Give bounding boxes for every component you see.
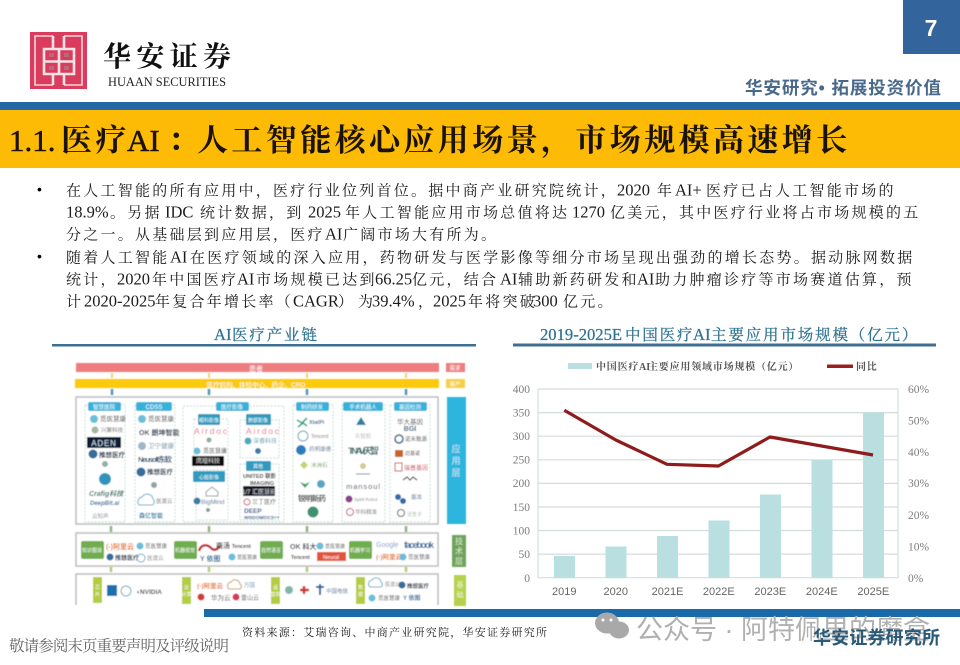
foundation layer: 营商 — [270, 591, 281, 598]
column: health management: 觅医慧康 — [100, 414, 126, 423]
chart legend: 同比 — [856, 360, 878, 373]
technology layer: 医渡云 — [147, 554, 164, 562]
left axis labels: 200 — [513, 478, 530, 490]
left axis labels: 150 — [513, 502, 530, 514]
column: medical devices: 迈基诺 — [405, 450, 420, 457]
column: medical imaging: 眼科影像 — [199, 417, 219, 424]
right panel heading — [513, 325, 936, 346]
chart legend: 中国医疗 — [596, 360, 639, 373]
column: medical devices: 瑞普基因 — [404, 464, 428, 472]
column: CDSS: 觅医慧康 — [148, 414, 174, 423]
body text: second bullet: AI — [500, 270, 517, 288]
body text: second bullet: 统计， — [66, 272, 118, 288]
source note: 资料来源：艾瑞咨询、中商产业研究院，华安证券研究所 — [242, 625, 547, 639]
column: medical imaging: 1/7 汇医慧影 — [242, 488, 276, 496]
body text: second bullet: 2020-2025 — [84, 292, 156, 310]
foundation layer: 中国电信 — [326, 587, 349, 595]
technology layer: Google — [376, 542, 399, 549]
watermark icon: WeChat — [595, 612, 629, 638]
column: drug discovery: XtalPi — [309, 420, 325, 426]
application layer side label: 用 — [451, 456, 461, 466]
body text: second bullet — [37, 248, 915, 310]
body text: second bullet: 在医疗领域的深入应用，药物研发与医学影像等细分市场呈现出强劲的增长态势。据动脉网数据 — [190, 248, 915, 266]
right panel heading: AI — [693, 325, 711, 344]
column: surgical robots: 手术机器人 — [349, 403, 377, 411]
foundation layer: (-)阿里云 — [197, 582, 223, 590]
column: CDSS: CDSS — [146, 405, 162, 411]
body text: second bullet: 66.25 — [375, 270, 412, 288]
technology layer: 商汤 — [216, 541, 230, 550]
header blue rule — [0, 102, 960, 110]
technology layer: Tencent — [291, 555, 310, 561]
body text: first bullet: 18.9% — [66, 202, 109, 222]
body text: first bullet: 。另据 — [110, 204, 162, 222]
foundation layer: 片 — [95, 591, 100, 598]
column: medical imaging: DEEP — [244, 508, 262, 515]
column: CDSS: 森亿智能 — [139, 512, 163, 520]
logo wordmark: 华安证券 — [103, 41, 231, 73]
body text: second bullet: AI — [637, 270, 654, 288]
chart legend — [568, 360, 878, 373]
title banner: 医疗 — [61, 123, 130, 158]
technology layer — [76, 533, 438, 566]
technology layer: Tencent — [232, 544, 251, 550]
technology layer: facebook — [404, 540, 435, 550]
left axis labels: 300 — [513, 431, 530, 443]
right axis labels: 20% — [908, 510, 930, 522]
x axis labels: 2020 — [604, 586, 628, 598]
right axis labels: 60% — [908, 384, 930, 396]
x axis labels: 2019 — [552, 586, 577, 598]
body text: second bullet: 亿元，结合 — [412, 272, 498, 288]
title banner: ： — [168, 123, 202, 158]
technology layer: OK 科大 — [290, 542, 316, 551]
column: surgical robots: mansoul — [346, 482, 380, 491]
column: drug discovery — [296, 402, 332, 518]
body text: first bullet: 2020 — [617, 180, 650, 200]
foundation layer: 据 — [358, 591, 363, 598]
column: CDSS: 推想医疗 — [147, 467, 174, 476]
technology layer side label: 技 — [455, 536, 463, 546]
demand tier bar — [76, 363, 465, 373]
body text: second bullet: 亿元。 — [563, 294, 615, 310]
application layer side label: 层 — [451, 468, 461, 478]
column: health management: 云知声 — [92, 512, 109, 520]
column: health management: 推想医疗 — [99, 450, 126, 459]
x axis labels: 2025E — [857, 586, 889, 598]
column: medical devices: 泛生子 — [407, 511, 422, 518]
body text: first bullet — [37, 180, 921, 244]
foundation layer: 华为云 — [211, 593, 231, 602]
disclaimer: 敬请参阅末页重要声明及评级说明 — [9, 636, 229, 655]
right axis labels: 10% — [908, 542, 930, 554]
left axis labels: 50 — [518, 549, 530, 561]
right axis labels: 50% — [908, 416, 930, 428]
body text: second bullet: 市场规模已达到 — [256, 270, 377, 288]
body text: second bullet: AI — [237, 270, 254, 288]
chart legend: AI — [639, 362, 650, 373]
body text: second bullet: 2020 — [117, 270, 150, 288]
right axis labels: 40% — [908, 447, 930, 459]
technology layer: 知识图谱 — [82, 547, 102, 554]
column: surgical robots: 天智航 — [355, 432, 372, 440]
right panel heading: 2019-2025E — [540, 325, 622, 344]
column: CDSS: OK 朗坤智能 — [139, 428, 179, 437]
column: medical imaging: UNITED 联影 — [243, 472, 277, 480]
chart legend: 主要应用领域市场规模（亿元） — [648, 360, 799, 373]
growth line — [564, 410, 873, 466]
technology layer: Y 依图 — [200, 554, 220, 563]
foundation layer: 觅医慧康 — [378, 594, 401, 602]
foundation layer: Y 依图 — [403, 594, 421, 602]
column: medical imaging: 心脏影像 — [199, 474, 219, 481]
column: surgical robots: TINAVI 天智 — [348, 445, 379, 456]
technology layer side label: 层 — [455, 557, 463, 566]
x axis labels: 2023E — [754, 586, 786, 598]
body text: first bullet: 医疗已占人工智能市场的 — [706, 182, 896, 200]
application layer side label: 应 — [451, 443, 461, 454]
technology layer: Neural — [323, 555, 339, 561]
logo English name: HUAAN SECURITIES — [108, 74, 226, 89]
technology layer: 机器学习 — [350, 547, 370, 554]
body text: first bullet: 1270 — [572, 202, 605, 222]
chart gridlines and axes — [538, 389, 898, 578]
column: medical imaging: 肺部影像 — [248, 417, 268, 424]
foundation layer side label — [454, 575, 466, 606]
column: medical devices: 基准 — [411, 493, 423, 501]
customer tier bar — [75, 379, 465, 389]
technology layer: 推想医疗 — [115, 554, 139, 562]
body text: second bullet: 计 — [66, 294, 83, 310]
column: medical imaging: Airdoc — [246, 426, 280, 436]
technology layer side label: 术 — [455, 546, 463, 556]
left axis labels: 100 — [513, 526, 530, 538]
body text: second bullet: 随着人工智能 — [66, 250, 170, 266]
application layer frame — [76, 397, 438, 524]
body text: first bullet: 广阔市场大有所为。 — [343, 226, 498, 244]
body text: second bullet: AI — [170, 248, 187, 266]
body text: second bullet: 年将突破 — [468, 292, 537, 310]
right panel heading: 主要应用市场规模（亿元） — [711, 325, 919, 344]
column: medical imaging: 兰丁医疗 — [252, 498, 276, 506]
body text: second bullet: 年复合年增长率（ — [155, 292, 293, 310]
body text: second bullet: 为 — [358, 294, 375, 310]
application layer side label — [447, 397, 466, 524]
foundation layer: 推想医疗 — [407, 582, 430, 590]
body text: first bullet: AI — [325, 224, 342, 244]
column: medical imaging: IMAGING — [250, 481, 274, 487]
left axis labels: 400 — [513, 384, 530, 396]
foundation layer: ◖NVIDIA — [136, 589, 162, 596]
column: CDSS: 医渡云 — [156, 497, 173, 505]
technology layer side label — [452, 535, 466, 567]
column: CDSS: 卫宁健康 — [148, 441, 174, 450]
technology layer: 觅医慧康 — [325, 543, 345, 550]
column: surgical robots: Spirit Robot — [354, 497, 378, 502]
foundation layer: 雷山云 — [241, 594, 259, 602]
left panel heading: 医疗产业链 — [232, 326, 319, 344]
technology layer: 觅医慧康 — [237, 554, 257, 561]
body text: first bullet: 统计数据，到 — [200, 204, 304, 222]
column: medical imaging: Airdoc — [194, 426, 228, 436]
column: medical devices — [394, 402, 428, 518]
body text: second bullet: 2025 — [433, 292, 466, 310]
body text: first bullet: 分之一。从基础层到应用层，医疗 — [66, 226, 325, 244]
right axis labels: 0% — [908, 573, 924, 585]
column: drug discovery: 锐明新药 — [298, 493, 326, 503]
title banner: AI — [127, 123, 160, 158]
x axis labels: 2022E — [703, 586, 735, 598]
technology layer: 觅医慧康 — [408, 553, 431, 561]
column: medical imaging: 觅医慧康 — [203, 447, 227, 455]
left axis labels — [513, 384, 530, 585]
column: drug discovery: 制药研发 — [301, 403, 323, 411]
column: health management: DeepBit.ai — [90, 501, 120, 507]
column: CDSS: Neusoft东软 — [138, 454, 172, 464]
title banner: 1.1. — [9, 123, 56, 158]
body text: second bullet: 39.4% — [372, 292, 415, 310]
body text: second bullet: 助力肿瘤诊疗等市场赛道估算，预 — [655, 270, 914, 288]
page number box: 7 — [925, 15, 937, 41]
right panel heading: 中国医疗 — [625, 326, 694, 344]
column: medical imaging — [192, 402, 280, 520]
body text: first bullet: 在人工智能的所有应用中，医疗行业位列首位。据中商产业研究院统计， — [66, 182, 618, 200]
column: medical imaging: WISDOM/OCS++ — [244, 515, 280, 520]
technology layer: (-)阿里云 — [376, 553, 402, 561]
column: medical imaging: 鹰瞳科技 — [196, 457, 220, 465]
left panel heading — [52, 325, 476, 346]
demand tier bar: 需求 — [449, 364, 461, 372]
body text: second bullet: 辅助新药研发和 — [518, 270, 639, 288]
column: medical imaging: 医疗影像 — [221, 403, 243, 411]
title banner — [0, 110, 960, 168]
bars — [554, 412, 884, 578]
column: surgical robots: 华科精准 — [355, 508, 378, 516]
chart: market size and growth — [513, 360, 930, 598]
foundation layer: 芯 — [95, 584, 100, 591]
page number box — [903, 0, 960, 54]
foundation layer: 计算 — [181, 591, 192, 598]
foundation layer — [76, 574, 438, 605]
foundation layer: 医渡云 — [385, 581, 400, 588]
technology layer: 自然语言 — [261, 547, 281, 554]
foundation layer: 运 — [273, 584, 278, 591]
customer tier bar: 医疗机构、体检中心、药企、CRO — [207, 380, 305, 389]
body text: second bullet: ） — [338, 294, 355, 310]
watermark text: 公众号 · 阿特佩里的魔盒 — [636, 615, 930, 645]
right axis labels — [908, 384, 930, 585]
column: medical devices: 诺禾致源 — [405, 435, 428, 443]
technology layer: 机器视觉 — [175, 547, 195, 554]
body text: first bullet: 年人工智能应用市场总值将达 — [345, 204, 569, 222]
x axis labels: 2021E — [652, 586, 683, 598]
foundation layer side label: 基 — [456, 580, 464, 589]
body text: first bullet: • — [37, 181, 42, 197]
footer blue rule — [204, 609, 960, 617]
x axis labels: 2024E — [806, 586, 838, 598]
demand tier bar: 患者 — [249, 364, 263, 373]
column: CDSS — [136, 402, 179, 520]
x axis labels — [552, 586, 889, 598]
column: medical imaging: BigMind — [201, 499, 225, 506]
body text: second bullet: ， — [418, 294, 435, 310]
column: health management: ADEN — [91, 439, 117, 448]
column: surgical robots — [343, 402, 383, 516]
right axis labels: 30% — [908, 478, 930, 490]
foundation layer side label: 础 — [456, 590, 464, 599]
column: health management: 兴聚科技 — [101, 426, 124, 434]
column: drug discovery: 药明康德 — [309, 445, 332, 453]
column: health management: 智慧医院 — [93, 403, 115, 411]
column: drug discovery: Tencent — [311, 434, 329, 440]
column: medical imaging: 深睿科技 — [253, 437, 277, 445]
title banner: 人工智能核心应用场景，市场规模高速增长 — [197, 123, 851, 159]
left axis labels: 0 — [524, 573, 530, 585]
left axis labels: 250 — [513, 454, 530, 466]
logo: Huaan Securities — [30, 32, 231, 89]
body text: second bullet: 年中国医疗 — [152, 270, 238, 288]
body text: first bullet: 年 — [657, 182, 674, 200]
foundation layer: 数 — [358, 584, 363, 591]
customer tier bar: 客户 — [449, 380, 461, 388]
column: health management: Crafig科技 — [89, 490, 124, 498]
body text: second bullet: CAGR — [293, 292, 339, 310]
body text: second bullet: • — [37, 248, 42, 264]
arrows between tiers — [111, 373, 406, 572]
column: medical devices: 基因检测 — [399, 403, 421, 411]
body text: first bullet: AI+ — [675, 180, 702, 200]
body text: second bullet: 300 — [533, 292, 558, 310]
foundation layer: 云 — [184, 585, 189, 591]
column: health management — [87, 402, 126, 520]
logo mark — [30, 32, 87, 89]
column: medical devices: 华大基因 — [397, 417, 423, 426]
body text: first bullet: 2025 — [308, 202, 341, 222]
left panel heading: AI — [214, 325, 232, 344]
left axis labels: 350 — [513, 408, 530, 420]
technology layer: (-)阿里云 — [106, 543, 134, 551]
technology layer: 觅医慧康 — [145, 542, 168, 550]
body text: first bullet: IDC — [165, 202, 193, 222]
diagram: AI medical industry chain — [75, 363, 466, 606]
slogan: 华安研究• 拓展投资价值 — [745, 78, 941, 98]
column: medical devices: BGI — [404, 426, 416, 433]
column: medical imaging: 其他 — [253, 463, 263, 470]
footer institute name: 华安证券研究所 — [813, 627, 940, 648]
foundation layer: 万国 — [244, 582, 256, 589]
column: drug discovery: 冰洲石 — [311, 461, 328, 469]
body text: first bullet: 亿美元，其中医疗行业将占市场规模的五 — [610, 204, 921, 222]
